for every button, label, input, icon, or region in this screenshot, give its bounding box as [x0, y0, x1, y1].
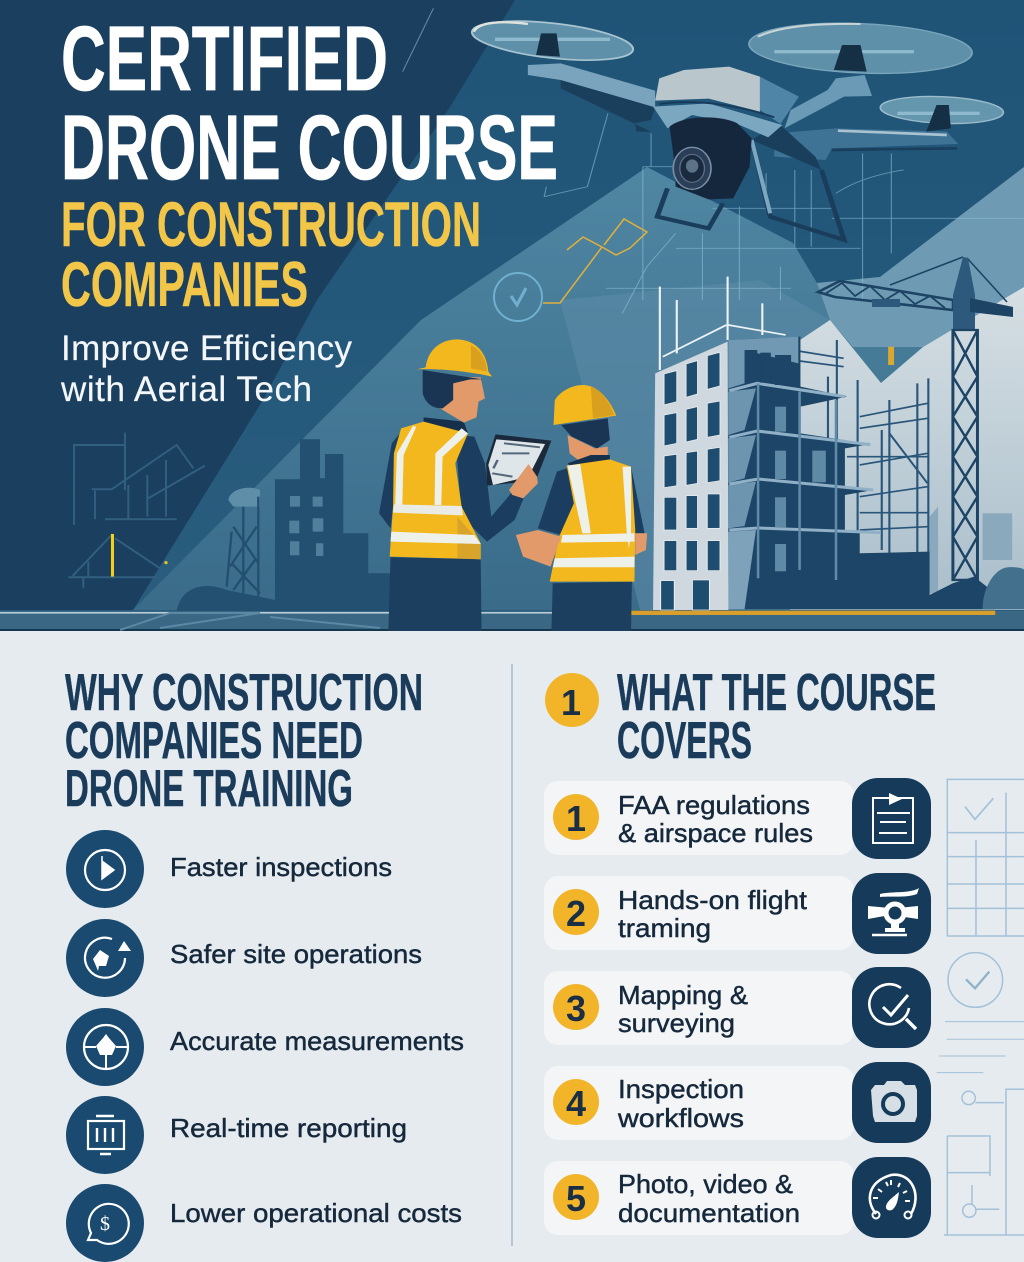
course item 5: [544, 1157, 931, 1238]
blueprint sketch: [403, 8, 1024, 313]
left heading: COMPANIES NEED: [65, 712, 363, 770]
title line: certified: CERTIFIED: [61, 8, 388, 110]
pale mountain: [790, 287, 1024, 610]
fuselage: [653, 67, 822, 170]
worker right: [516, 385, 647, 632]
yellow flight path: [543, 219, 647, 303]
benefit: real-time reporting: [66, 1096, 407, 1174]
benefit: accurate measurements: [66, 1008, 464, 1086]
course item 2: 2: [566, 893, 586, 934]
right blueprint decoration: [937, 779, 1024, 1235]
right heading: [617, 664, 936, 770]
benefit: safer site operations: Safer site operations: [170, 939, 422, 969]
upper scaffold poles: [660, 277, 786, 370]
course item 3: surveying: [618, 1008, 735, 1038]
benefit: faster inspections: Faster inspections: [170, 852, 392, 882]
side interior: [728, 337, 995, 609]
subtitle line: companies: COMPANIES: [61, 250, 308, 320]
worker left: [379, 339, 524, 632]
light diagonal band: [133, 167, 1024, 610]
tablet: [486, 434, 551, 498]
heading badge: [545, 673, 599, 727]
panel: why construction companies need drone training: [65, 664, 464, 1262]
checkmark badge: [494, 273, 542, 321]
construction building and crane: [631, 277, 1024, 615]
panel: what the course covers: [544, 664, 936, 1238]
course item 1: [544, 778, 931, 859]
course item 3: Mapping &: [618, 980, 748, 1010]
left skyline sketch: [68, 433, 390, 612]
floor slabs: [729, 383, 881, 533]
scaffolding: [792, 340, 928, 553]
course item 1: 1: [566, 798, 586, 839]
course item 5: documentation: [618, 1198, 800, 1228]
orange ground line: [631, 611, 995, 615]
course item 2: Hands-on flight: [618, 885, 808, 915]
hero tagline: [60, 329, 352, 409]
hook: [888, 347, 894, 365]
landing gear: [657, 140, 844, 240]
benefit: accurate measurements: Accurate measurements: [170, 1026, 464, 1056]
benefit: safer site operations: [66, 919, 422, 997]
benefit: lower operational costs: $: [100, 1213, 110, 1235]
hero tagline: Improve Efficiency: [61, 329, 352, 368]
hero title: [61, 8, 558, 320]
hero tagline: with Aerial Tech: [60, 370, 312, 409]
crane tower: [953, 330, 977, 580]
course item 4: 4: [566, 1083, 586, 1124]
motors: [536, 33, 951, 132]
dark left wedge: [0, 0, 515, 610]
left heading: DRONE TRAINING: [65, 760, 353, 818]
benefit: faster inspections: [66, 830, 392, 908]
silhouette buildings: [177, 439, 390, 612]
course item 3: [544, 967, 931, 1048]
course item 4: workflows: [617, 1103, 744, 1133]
title line: drone course: DRONE COURSE: [61, 97, 558, 199]
course item 4: Inspection: [618, 1074, 744, 1104]
benefit: real-time reporting: Real-time reporting: [170, 1113, 407, 1143]
divider: [511, 664, 513, 1246]
hero illustration: [0, 0, 1024, 632]
course item 3: 3: [566, 988, 586, 1029]
course item 5: 5: [566, 1178, 586, 1219]
course item 1: FAA regulations: [618, 790, 810, 820]
facade windows: [661, 352, 720, 610]
course item 2: traming: [618, 913, 711, 943]
drone: [469, 14, 1004, 240]
arms: [528, 63, 958, 160]
crane jib: [818, 257, 1013, 330]
benefit: lower operational costs: [66, 1184, 462, 1262]
far-right bush: [983, 567, 1024, 609]
subtitle line: for construction: FOR CONSTRUCTION: [61, 190, 481, 260]
course item 5: Photo, video &: [618, 1169, 793, 1199]
left heading: WHY CONSTRUCTION: [65, 664, 423, 722]
camera: [670, 117, 752, 199]
ground road: [0, 611, 1024, 631]
lower panel background: [0, 631, 1024, 1262]
right silhouette: [930, 507, 1012, 593]
course item 1: & airspace rules: [618, 818, 813, 848]
course item 2: [544, 873, 931, 954]
heading badge: 1: [561, 682, 581, 723]
left heading: [65, 664, 423, 818]
course item 4: [544, 1062, 931, 1143]
right heading: COVERS: [617, 712, 752, 770]
rotors: [469, 14, 1004, 126]
workers: [379, 339, 647, 632]
benefit: lower operational costs: Lower operational costs: [170, 1198, 462, 1228]
facade: [653, 342, 728, 610]
